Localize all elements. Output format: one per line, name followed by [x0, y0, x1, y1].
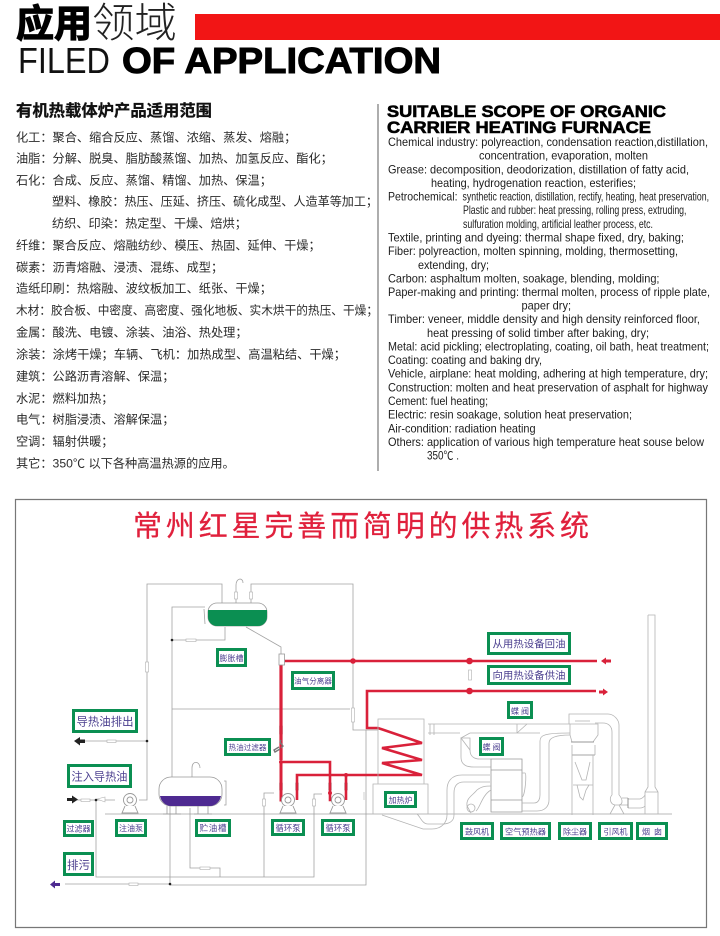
label: injection pump: 注油泵 — [119, 823, 143, 833]
furnace — [373, 719, 428, 814]
english scope heading: SUITABLE SCOPE OF ORGANIC — [387, 103, 666, 121]
chinese scope heading: 有机热载体炉产品适用范围 — [16, 101, 212, 120]
valves — [81, 592, 472, 886]
english application list: Timber: veneer, middle density and high density reinforced floor, — [388, 313, 700, 326]
english application list: Others: application of various high temperature heat souse below — [388, 436, 705, 449]
chinese application list: 空调：辐射供暖； — [16, 434, 114, 448]
label: chimney — [638, 824, 666, 838]
english application list: Fiber: polyreaction, molten spinning, molding, thermosetting, — [388, 245, 678, 258]
pumps — [122, 794, 346, 813]
label: expansion tank: 膨胀槽 — [220, 653, 244, 663]
label: butterfly valve 1: 蝶阀 — [511, 706, 529, 716]
english application list: paper dry; — [522, 300, 571, 312]
label: filter: 过滤器 — [66, 824, 90, 834]
title: chinese — [16, 0, 177, 49]
label: expansion tank — [218, 650, 246, 666]
storage tank — [159, 777, 222, 814]
air ducts and preheater — [382, 724, 570, 829]
english application list: Cement: fuel heating; — [388, 395, 488, 408]
label: circulation pump 2: 循环泵 — [326, 823, 350, 833]
label: supply oil: 向用热设备供油 — [492, 669, 566, 682]
english application list: heat pressing of solid timber after baking, dry; — [427, 327, 649, 340]
label: oil injection: 注入导热油 — [72, 770, 128, 784]
induced draft fan duct — [593, 714, 645, 814]
label: return oil — [488, 634, 570, 654]
english application list: Coating: coating and baking dry, — [388, 354, 542, 367]
title: chinese: 应用 — [16, 4, 92, 46]
label: furnace — [386, 792, 416, 806]
oil-gas separator — [279, 654, 284, 665]
english scope heading — [387, 103, 666, 137]
red junction dots and arrows — [279, 658, 611, 795]
chinese application list — [16, 130, 378, 470]
chinese application list: 石化：合成、反应、蒸馏、精馏、加热、保温； — [16, 172, 272, 188]
chinese application list: 塑料、橡胶：热压、压延、挤压、硫化成型、人造革等加工； — [52, 194, 378, 208]
label: furnace: 加热炉 — [388, 795, 412, 805]
chinese application list: 纤维：聚合反应、熔融纺纱、模压、热固、延伸、干燥； — [16, 238, 321, 252]
label: circulation pump 1 — [272, 820, 304, 834]
label: storage tank — [196, 820, 230, 836]
english application list — [388, 136, 710, 463]
english application list: concentration, evaporation, molten — [479, 150, 648, 163]
english application list: Grease: decomposition, deodorization, distillation of fatty acid, — [388, 163, 689, 176]
english application list: extending, dry; — [418, 259, 489, 272]
chinese application list: 纺织、印染：热定型、干燥、焙烘； — [52, 216, 247, 230]
chimney — [645, 615, 658, 814]
label: sewage — [64, 854, 92, 874]
panel: heating system diagram frame — [16, 500, 706, 928]
label: oil discharge — [74, 710, 136, 732]
label: blower — [462, 824, 492, 838]
cyclone dust collector — [569, 714, 598, 815]
label: filter — [64, 822, 92, 836]
english application list: Paper-making and printing: thermal molten, process of ripple plate, — [388, 286, 710, 299]
english application list: Chemical industry: polyreaction, condensation reaction,distillation, — [388, 136, 708, 149]
english application list: Textile, printing and dyeing: thermal shape fixed, dry, baking; — [388, 232, 684, 244]
label: storage tank: 贮油槽 — [200, 823, 227, 833]
label: chimney: 烟囱 — [642, 826, 662, 836]
chinese application list: 涂装：涂烤干燥；车辆、飞机：加热成型、高温粘结、干燥； — [16, 346, 346, 362]
hot oil filter — [274, 740, 283, 752]
chinese application list: 碳素：沥青熔融、浸渍、混练、成型； — [16, 260, 223, 274]
chinese application list: 金属：酸洗、电镀、涂装、油浴、热处理； — [16, 324, 248, 340]
english application list: Construction: molten and heat preservation of asphalt for highway — [388, 381, 708, 394]
chinese application list: 造纸印刷：热熔融、波纹板加工、纸张、干燥； — [16, 280, 272, 296]
column divider — [377, 104, 379, 471]
label: oil gas separator — [292, 672, 334, 688]
label: blower: 鼓风机 — [465, 826, 489, 836]
label: hot oil filter: 热油过滤器 — [228, 742, 267, 752]
label: oil gas separator: 油气分离器 — [294, 676, 332, 686]
chinese application list: 其它：350℃ 以下各种高温热源的应用。 — [16, 456, 235, 470]
black and purple flow arrows and nodes — [50, 639, 173, 888]
hot oil red piping — [281, 661, 597, 800]
diagram title: 常州红星完善而简明的供热系统 — [133, 503, 589, 545]
expansion tank — [208, 603, 267, 626]
label: butterfly valve 1 — [508, 702, 532, 718]
label: oil injection — [68, 766, 130, 786]
chinese application list: 水泥：燃料加热； — [16, 390, 114, 406]
label: injection pump — [116, 820, 146, 836]
label: dust collector: 除尘器 — [563, 826, 587, 836]
process piping — [65, 579, 672, 885]
chinese application list: 化工：聚合、缩合反应、蒸馏、浓缩、蒸发、熔融； — [16, 130, 296, 144]
english application list: 350℃ . — [427, 450, 459, 463]
label: hot oil filter — [226, 740, 270, 754]
title: english: FILED — [18, 40, 110, 81]
label: air preheater — [502, 824, 550, 838]
label: draft fan — [600, 824, 632, 838]
chinese application list: 木材：胶合板、中密度、高密度、强化地板、实木烘干的热压、干燥； — [16, 302, 378, 318]
english application list: Electric: resin soakage, solution heat preservation; — [388, 409, 632, 422]
label boxes — [64, 634, 666, 874]
red banner bar — [195, 14, 720, 40]
label: air preheater: 空气预热器 — [505, 826, 546, 836]
english application list: Vehicle, airplane: heat molding, adhering at high temperature, dry; — [388, 368, 708, 381]
label: butterfly valve 2 — [480, 738, 502, 754]
english application list: Petrochemical: — [388, 191, 458, 204]
english application list: heating, hydrogenation reaction, esterifies; — [431, 177, 636, 190]
label: dust collector — [560, 824, 590, 838]
english application list: sulfuration molding, artificial leather process, etc. — [463, 218, 653, 231]
title: english: OF APPLICATION — [122, 40, 441, 81]
label: butterfly valve 2: 蝶阀 — [482, 742, 500, 752]
label: circulation pump 1: 循环泵 — [276, 823, 300, 833]
english application list: Carbon: asphaltum molten, soakage, blending, molding; — [388, 272, 660, 286]
english scope heading: CARRIER HEATING FURNACE — [387, 119, 651, 137]
english application list: Air-condition: radiation heating — [388, 422, 536, 435]
label: oil discharge: 导热油排出 — [76, 714, 134, 728]
header — [16, 0, 720, 81]
chinese application list: 电气：树脂浸渍、溶解保温； — [16, 412, 174, 426]
chinese application list: 油脂：分解、脱臭、脂肪酸蒸馏、加热、加氢反应、酯化； — [16, 150, 333, 166]
label: return oil: 从用热设备回油 — [492, 638, 566, 650]
label: sewage: 排污 — [67, 858, 90, 872]
label: draft fan: 引风机 — [604, 826, 628, 836]
label: circulation pump 2 — [322, 820, 354, 834]
label: supply oil — [488, 666, 570, 684]
chinese application list: 建筑：公路沥青溶解、保温； — [16, 368, 174, 384]
